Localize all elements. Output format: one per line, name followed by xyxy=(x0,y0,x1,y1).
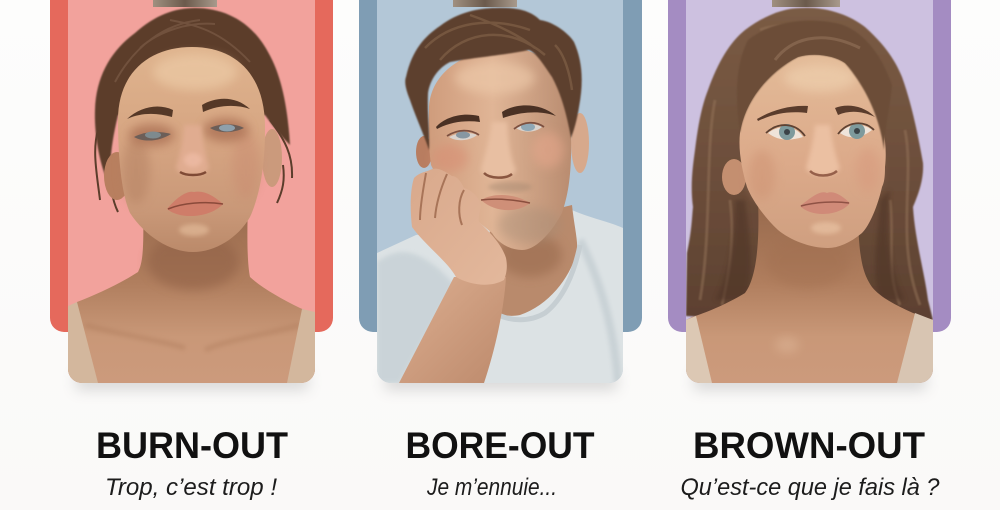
face xyxy=(118,47,265,252)
top straps xyxy=(686,316,712,383)
neck and chest xyxy=(68,221,315,383)
ear xyxy=(722,159,746,195)
ears xyxy=(571,113,589,173)
neck and chest xyxy=(686,200,933,383)
eyes xyxy=(134,132,171,141)
nose xyxy=(481,122,516,178)
brows xyxy=(757,106,808,121)
tagline: brown-out: Qu’est-ce que je fais là ? xyxy=(680,474,940,501)
back card: purple xyxy=(668,0,951,332)
arm xyxy=(399,277,506,383)
brows xyxy=(436,115,480,129)
hair xyxy=(95,8,290,190)
back card: red xyxy=(50,0,333,332)
nose xyxy=(806,125,840,176)
clip xyxy=(153,0,217,7)
lips xyxy=(800,192,850,214)
hair xyxy=(405,8,582,150)
clip xyxy=(772,0,840,7)
heading: BROWN-OUT: BROWN-OUT xyxy=(693,425,925,466)
portrait: bored man xyxy=(377,0,623,383)
hand xyxy=(411,169,507,285)
hair back xyxy=(686,8,933,320)
face xyxy=(739,55,886,248)
nose xyxy=(176,125,209,176)
lips xyxy=(167,192,223,216)
eyes xyxy=(768,127,803,140)
panel: brown-out xyxy=(668,0,951,390)
heading: BURN-OUT: BURN-OUT xyxy=(96,425,288,466)
face xyxy=(429,48,571,250)
t-shirt xyxy=(377,210,623,383)
brows xyxy=(127,107,173,119)
eyes xyxy=(449,133,477,140)
portrait: worried woman xyxy=(686,0,933,383)
back card: blue xyxy=(359,0,642,332)
tagline: bore-out: Je m’ennuie... xyxy=(426,474,557,501)
lips xyxy=(481,195,530,210)
neck xyxy=(489,205,577,316)
panel: bore-out xyxy=(359,0,642,390)
portrait: exhausted woman xyxy=(68,0,315,383)
hair front xyxy=(737,21,892,150)
tagline: burn-out: Trop, c’est trop ! xyxy=(105,474,277,501)
clip xyxy=(453,0,517,7)
heading: BORE-OUT: BORE-OUT xyxy=(406,425,595,466)
panel: burn-out xyxy=(50,0,333,390)
top straps xyxy=(68,302,98,383)
ears xyxy=(104,152,124,200)
